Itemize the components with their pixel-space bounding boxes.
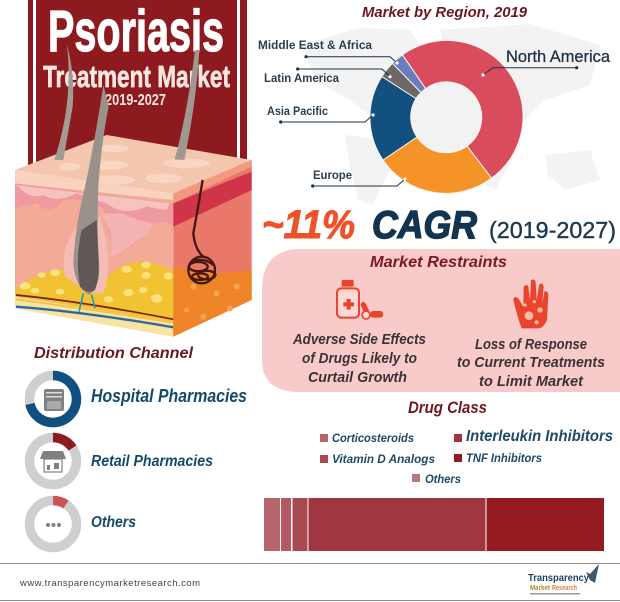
- heading: market restraints: Market Restraints: [370, 254, 507, 271]
- label: Europe: [311, 168, 407, 188]
- stacked bar: drug class share: [264, 498, 604, 551]
- follicle sheath: [64, 217, 108, 293]
- text: loss of response: [457, 336, 605, 390]
- legend: others: Others: [425, 472, 461, 486]
- panel: market restraints: [262, 249, 620, 392]
- CAGR headline: CAGR: [372, 204, 477, 247]
- donut chart title: Market by Region, 2019: [362, 4, 528, 21]
- segment: North America: [402, 40, 523, 178]
- label: retail pharmacies: Retail Pharmacies: [91, 453, 213, 470]
- others ring: [30, 500, 76, 548]
- CAGR headline: (2019-2027): [489, 217, 616, 243]
- footer rules: [0, 563, 620, 601]
- CAGR headline: ~11%: [262, 203, 355, 247]
- label: Europe: Europe: [313, 168, 352, 182]
- icon: three dots: [46, 523, 61, 527]
- centre hair: [73, 85, 109, 295]
- text: adverse side effects: Curtail Growth: [308, 369, 407, 386]
- wavy dermis layer: [15, 183, 173, 250]
- legend: tnf inhibitors: TNF Inhibitors: [466, 451, 542, 465]
- label: hospital pharmacies: Hospital Pharmacies: [91, 386, 247, 406]
- fat layer: [15, 262, 173, 322]
- label: Middle East & Africa: [258, 38, 399, 65]
- hospital pharmacies ring: [30, 376, 76, 422]
- label: Asia Pacific: Asia Pacific: [267, 104, 328, 118]
- text: adverse side effects: of Drugs Likely to: [302, 350, 417, 367]
- label: Latin America: [264, 67, 392, 85]
- segment: Europe: [383, 137, 492, 193]
- text: adverse side effects: [292, 331, 426, 386]
- retail pharmacies ring: [30, 438, 76, 484]
- logo: Transparency Market Research: Research: [552, 585, 577, 592]
- label: North America: North America: [506, 47, 611, 66]
- label: Asia Pacific: [267, 104, 375, 124]
- footer website: www.transparencymarketresearch.com: [19, 578, 200, 589]
- text: loss of response: to Limit Market: [479, 373, 584, 390]
- label: others: Others: [91, 514, 136, 531]
- text: loss of response: Loss of Response: [475, 336, 587, 353]
- label: Middle East & Africa: Middle East & Africa: [258, 38, 372, 52]
- text: adverse side effects: Adverse Side Effects: [292, 331, 426, 348]
- side face: [173, 160, 252, 337]
- title: Psoriasis: Psoriasis: [48, 0, 224, 64]
- icon: medicine bottle and capsules: [337, 280, 383, 319]
- sweat gland: [188, 180, 215, 283]
- world map background: [300, 24, 600, 205]
- text: loss of response: to Current Treatments: [457, 354, 605, 371]
- skin cross-section illustration: [15, 43, 252, 337]
- donut chart: market by region: [370, 40, 523, 193]
- heading: distribution channel: Distribution Channel: [34, 345, 194, 362]
- subtitle: Treatment Market: Treatment Market: [43, 59, 230, 94]
- title banner: [28, 0, 247, 165]
- icon: storefront: [40, 451, 66, 472]
- donut hole: [411, 83, 480, 152]
- vessels and bottom layers: [15, 297, 173, 337]
- segment: Latin America: [382, 63, 421, 98]
- hair root vessels: [79, 293, 95, 312]
- front face base: [15, 170, 173, 337]
- logo: Transparency Market Research: Market: [530, 585, 551, 592]
- label: Latin America: Latin America: [264, 71, 339, 85]
- label: North America: [481, 47, 611, 77]
- icon: hand with skin lesions: [513, 279, 548, 328]
- years: 2019-2027: [105, 92, 166, 109]
- top epidermis surface: [15, 135, 252, 193]
- logo: Transparency Market Research: [528, 564, 599, 594]
- logo: Transparency Market Research: Transparency: [528, 573, 589, 584]
- legend: vitamin d analogs: Vitamin D Analogs: [332, 452, 435, 466]
- heading: drug class: Drug Class: [408, 398, 487, 417]
- segment: Asia Pacific: [370, 76, 417, 160]
- legend: interleukin inhibitors: Interleukin Inhibitors: [466, 428, 613, 445]
- icon: hospital building: [44, 389, 64, 411]
- left hair: [54, 43, 73, 160]
- CAGR headline: [262, 203, 616, 247]
- segment: Middle East and Africa: [392, 55, 426, 92]
- right hair: [175, 50, 199, 160]
- legend: drug class: [320, 428, 613, 486]
- legend: corticosteroids: Corticosteroids: [332, 431, 414, 445]
